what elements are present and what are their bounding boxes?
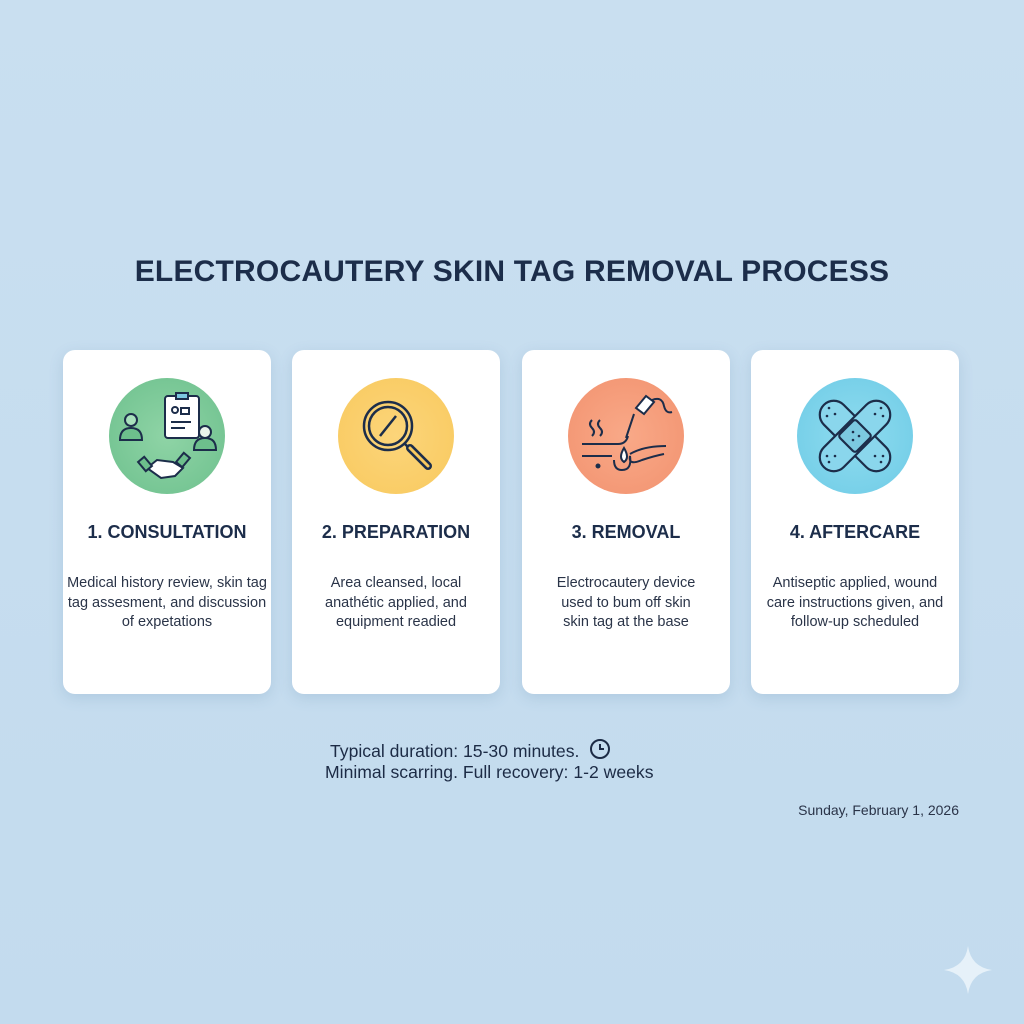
icon: magnifier — [338, 378, 454, 494]
text: removal: skin tag at the base — [563, 614, 689, 630]
icon: consultation — [109, 378, 225, 494]
text: consultation: Medical history review, skin tag — [67, 575, 267, 591]
text: consultation: tag assesment, and discussion — [68, 594, 266, 610]
text: consultation — [67, 575, 267, 630]
text: preparation: anathétic applied, and — [325, 594, 467, 610]
icon: clock — [590, 739, 610, 759]
title: ELECTROCAUTERY SKIN TAG REMOVAL PROCESS — [135, 255, 889, 288]
text: removal — [557, 575, 695, 630]
text: preparation — [325, 575, 467, 630]
text: aftercare — [767, 575, 943, 630]
panel: removal — [522, 350, 730, 694]
panel: preparation — [292, 350, 500, 694]
date: Sunday, February 1, 2026 — [798, 802, 959, 818]
text: preparation: equipment readied — [336, 614, 456, 630]
text: removal: Electrocautery device — [557, 575, 695, 591]
panel: aftercare — [751, 350, 959, 694]
icon: bandages — [797, 378, 913, 494]
panel: consultation — [63, 350, 271, 694]
text: aftercare: care instructions given, and — [767, 594, 943, 610]
text: aftercare: Antiseptic applied, wound — [773, 575, 937, 591]
heading: aftercare: 4. AFTERCARE — [790, 522, 920, 542]
icon: cautery — [568, 378, 684, 494]
heading: removal: 3. REMOVAL — [572, 522, 680, 542]
text: recovery: Minimal scarring. Full recovery: 1-2 weeks — [325, 762, 654, 782]
heading: consultation: 1. CONSULTATION — [88, 522, 246, 542]
text: aftercare: follow-up scheduled — [791, 614, 919, 630]
heading: preparation: 2. PREPARATION — [322, 522, 470, 542]
text: consultation: of expetations — [122, 614, 212, 630]
icon: sparkle — [944, 946, 992, 994]
text: preparation: Area cleansed, local — [331, 575, 461, 591]
text: removal: used to bum off skin — [561, 594, 691, 610]
text: duration: Typical duration: 15-30 minutes. — [330, 741, 579, 761]
